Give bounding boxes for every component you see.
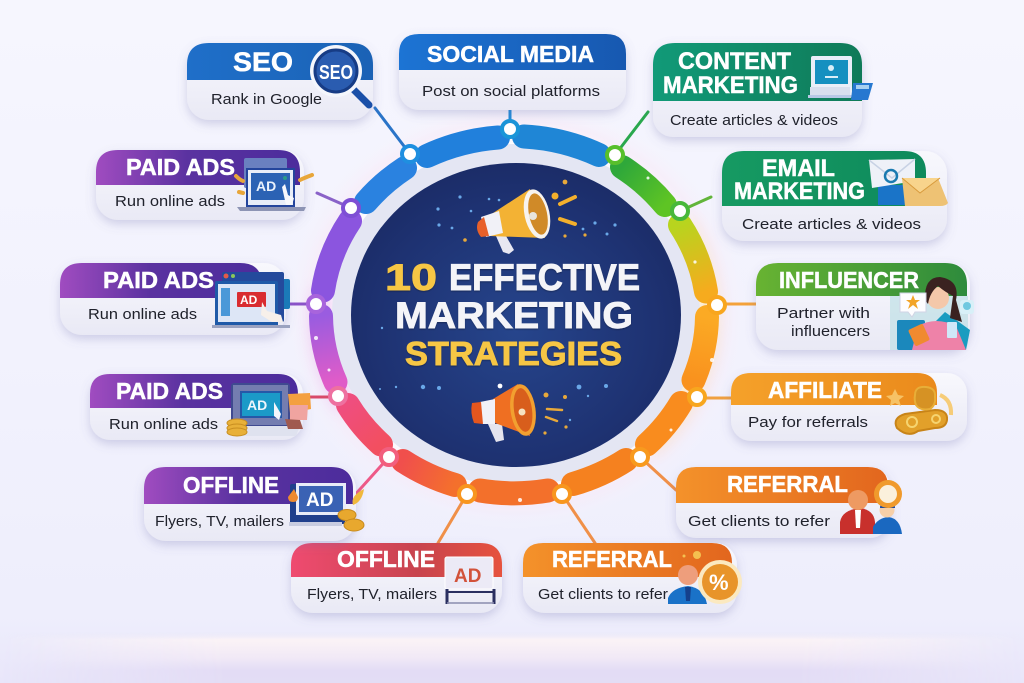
card: Referral bottom bbox=[523, 543, 742, 613]
heading: INFLUENCER bbox=[779, 267, 919, 293]
card: Paid Ads 1 bbox=[96, 150, 312, 220]
card: Social Media bbox=[399, 34, 626, 110]
heading: AFFILIATE bbox=[768, 377, 882, 403]
card: Paid Ads 3 bbox=[90, 374, 311, 440]
heading: PAID ADS bbox=[116, 378, 223, 404]
description: Flyers, TV, mailers bbox=[307, 586, 437, 603]
ring nodes bbox=[308, 121, 725, 502]
title: MARKETING bbox=[395, 295, 633, 336]
description: Get clients to refer bbox=[538, 586, 668, 603]
heading: REFERRAL bbox=[727, 471, 848, 497]
title bbox=[385, 257, 640, 372]
description: Get clients to refer bbox=[688, 513, 830, 530]
heading: CONTENT bbox=[678, 48, 791, 75]
card: Content Marketing bbox=[653, 43, 873, 137]
icon: AD laptop and coins bbox=[227, 383, 311, 436]
icon: AD screen and coins bbox=[288, 483, 364, 531]
heading: SOCIAL MEDIA bbox=[427, 41, 594, 67]
description: Create articles & videos bbox=[670, 112, 838, 129]
coloured ring segments bbox=[321, 136, 707, 493]
heading: PAID ADS bbox=[103, 267, 214, 293]
heading: OFFLINE bbox=[337, 546, 435, 572]
icon: browser ad window: AD bbox=[240, 293, 258, 307]
description: Run online ads bbox=[88, 306, 197, 323]
icon: bottom megaphone bbox=[471, 383, 568, 442]
icon: browser ad window bbox=[212, 272, 290, 328]
card: Influencer bbox=[756, 263, 974, 350]
card: Offline bottom bbox=[291, 543, 502, 613]
title: STRATEGIES bbox=[405, 335, 622, 372]
title: 10 bbox=[385, 257, 437, 298]
title: EFFECTIVE bbox=[449, 257, 640, 298]
heading: OFFLINE bbox=[183, 472, 279, 498]
soft ring colour glow bbox=[321, 225, 707, 445]
icon: billboard: AD bbox=[454, 566, 481, 587]
heading: PAID ADS bbox=[126, 154, 235, 180]
star dots bbox=[379, 180, 617, 421]
icon: gold link bbox=[886, 387, 951, 434]
icon: two clients bbox=[840, 480, 902, 534]
central ring bbox=[288, 108, 756, 543]
inner pale ring bbox=[332, 144, 700, 486]
ring glow bbox=[284, 99, 748, 529]
heading: REFERRAL bbox=[552, 546, 672, 572]
background bbox=[0, 633, 1024, 683]
icon: envelopes bbox=[869, 159, 948, 206]
icon: AD laptop and coins: AD bbox=[247, 397, 267, 413]
icon: AD window with cursor bbox=[236, 158, 312, 211]
centre circle bbox=[351, 163, 681, 467]
card: Affiliate bbox=[731, 373, 967, 441]
description: Partner with bbox=[777, 305, 870, 322]
heading: SEO bbox=[233, 47, 293, 77]
icon: client and percent badge: % bbox=[709, 570, 729, 595]
connector lines bbox=[288, 108, 756, 543]
heading bbox=[663, 48, 798, 99]
icon: client and percent badge bbox=[668, 551, 742, 604]
icon: AD screen and coins: AD bbox=[306, 490, 333, 511]
description: Pay for referrals bbox=[748, 414, 868, 431]
heading: MARKETING bbox=[734, 178, 865, 205]
description: Run online ads bbox=[109, 416, 218, 433]
icon: AD window with cursor: AD bbox=[256, 178, 276, 194]
description: Create articles & videos bbox=[742, 216, 921, 233]
card: SEO bbox=[187, 43, 373, 120]
icon: laptop and folder bbox=[808, 56, 873, 100]
heading: MARKETING bbox=[663, 72, 798, 99]
description: Post on social platforms bbox=[422, 83, 600, 100]
description: Flyers, TV, mailers bbox=[155, 513, 284, 530]
icon: magnifier bbox=[310, 45, 369, 105]
card: Referral right bbox=[676, 467, 902, 538]
ring highlights bbox=[314, 176, 714, 502]
description bbox=[777, 305, 870, 340]
heading bbox=[734, 155, 865, 205]
heading: EMAIL bbox=[762, 155, 835, 182]
description: influencers bbox=[791, 323, 870, 340]
description: Rank in Google bbox=[211, 91, 322, 108]
icon: influencer woman bbox=[890, 277, 974, 350]
card: Email Marketing bbox=[722, 151, 948, 241]
icon: top megaphone bbox=[477, 187, 575, 254]
card: Paid Ads 2 bbox=[60, 263, 290, 335]
card: Offline left bbox=[144, 467, 364, 541]
icon: magnifier: SEO bbox=[319, 62, 353, 84]
description: Run online ads bbox=[115, 193, 225, 210]
icon: billboard bbox=[445, 557, 494, 604]
